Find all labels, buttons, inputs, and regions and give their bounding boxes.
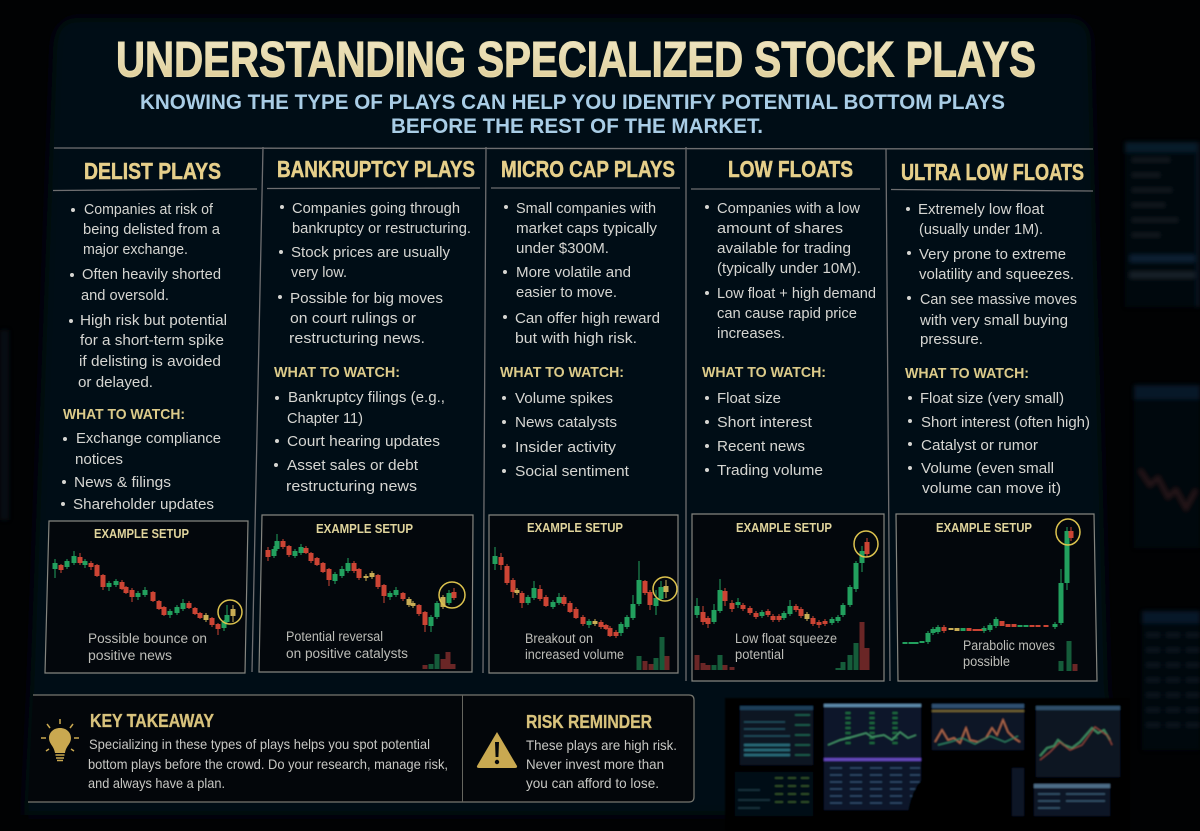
description bullets: major exchange. (83, 241, 188, 258)
example setup chart: delist: EXAMPLE SETUP (94, 527, 189, 541)
what to watch list: WHAT TO WATCH: (63, 406, 185, 423)
example setup chart: delist: Possible bounce on (88, 631, 207, 646)
callout: key takeaway: and always have a plan. (88, 775, 225, 791)
what to watch list (61, 406, 221, 513)
description bullets: and oversold. (81, 287, 169, 304)
example setup chart: micro cap: increased volume (525, 647, 624, 662)
description bullets: More volatile and (516, 264, 631, 281)
example setup chart: delist: positive news (88, 648, 172, 663)
description bullets (69, 201, 227, 391)
description bullets: being delisted from a (83, 221, 221, 238)
description bullets: for a short-term spike (80, 332, 224, 349)
example setup chart: ultra low floats: possible (963, 654, 1010, 669)
description bullets: market caps typically (516, 220, 657, 237)
what to watch list: Volume (even small (921, 460, 1054, 477)
what to watch list (905, 365, 1090, 497)
what to watch list: Asset sales or debt (287, 457, 419, 474)
monitor: lower right (1012, 768, 1110, 816)
what to watch list: Float size (717, 390, 781, 407)
trading desk monitors (725, 698, 1130, 831)
description bullets: Companies at risk of (84, 201, 214, 218)
description bullets: with very small buying (919, 312, 1068, 329)
what to watch list: Float size (very small) (920, 390, 1064, 407)
what to watch list: Short interest (often high) (921, 414, 1090, 431)
description bullets: bankruptcy or restructuring. (292, 220, 471, 237)
description bullets (705, 200, 876, 342)
description bullets: Stock prices are usually (291, 244, 450, 261)
subtitle: BEFORE THE REST OF THE MARKET. (391, 115, 763, 138)
callout: risk reminder: you can afford to lose. (526, 775, 659, 791)
callout: key takeaway (41, 711, 448, 791)
background screens: blurred monitors behind the board (0, 142, 1200, 750)
heading: low floats: LOW FLOATS (728, 156, 853, 182)
callout: risk reminder: Never invest more than (526, 756, 664, 772)
example setup chart: micro cap: EXAMPLE SETUP (527, 521, 623, 535)
description bullets: amount of shares (717, 220, 843, 237)
description bullets: (usually under 1M). (919, 221, 1043, 238)
column: ultra low floats (891, 159, 1097, 681)
what to watch list: Social sentiment (515, 463, 630, 480)
example setup chart: bankruptcy (259, 515, 473, 672)
what to watch list: Insider activity (515, 439, 617, 456)
description bullets: increases. (717, 325, 785, 342)
subtitle: KNOWING THE TYPE OF PLAYS CAN HELP YOU IDENTIFY POTENTIAL BOTTOM PLAYS (140, 91, 1005, 114)
description bullets: but with high risk. (515, 330, 637, 347)
monitor: line chart (1036, 706, 1120, 777)
description bullets: Very prone to extreme (919, 246, 1066, 263)
description bullets: under $300M. (516, 240, 609, 257)
what to watch list: Trading volume (717, 462, 823, 479)
description bullets: available for trading (717, 240, 851, 257)
what to watch list: restructuring news (286, 478, 417, 495)
what to watch list: Volume spikes (515, 390, 613, 407)
column: low floats (691, 156, 884, 681)
description bullets: Companies going through (292, 200, 460, 217)
example setup chart: bankruptcy: on positive catalysts (286, 646, 408, 661)
what to watch list: Catalyst or rumor (921, 437, 1038, 454)
callout: key takeaway: KEY TAKEAWAY (90, 711, 214, 731)
callout: key takeaway: bottom plays before the crowd. Do your research, manage risk, (88, 756, 448, 772)
what to watch list: Court hearing updates (287, 433, 440, 450)
column: delist plays (45, 158, 257, 673)
icon: light bulb (41, 719, 79, 760)
description bullets: Possible for big moves (290, 290, 443, 307)
what to watch list (274, 364, 445, 495)
monitor: price table and chart (824, 704, 921, 810)
example setup chart: micro cap (489, 515, 678, 673)
example setup chart: ultra low floats (896, 514, 1097, 681)
description bullets: can cause rapid price (717, 305, 857, 322)
description bullets: Companies with a low (717, 200, 860, 217)
what to watch list: WHAT TO WATCH: (274, 364, 400, 381)
description bullets: volatility and squeezes. (919, 266, 1074, 283)
what to watch list: News & filings (74, 474, 171, 491)
bottom callout bar (28, 695, 694, 802)
callout: risk reminder: RISK REMINDER (526, 712, 652, 732)
callout: risk reminder (477, 712, 677, 791)
what to watch list (500, 364, 630, 480)
example setup chart: low floats (692, 514, 884, 681)
example setup chart: bankruptcy: Potential reversal (286, 629, 383, 644)
description bullets: Can see massive moves (920, 291, 1077, 308)
callout: risk reminder: These plays are high risk. (526, 737, 677, 753)
what to watch list: Shareholder updates (73, 496, 214, 513)
heading: bankruptcy plays: BANKRUPTCY PLAYS (277, 156, 475, 182)
monitor: lower left (735, 772, 813, 816)
description bullets: restructuring news. (289, 330, 425, 347)
description bullets: very low. (291, 264, 347, 281)
example setup chart: low floats: Low float squeeze (735, 631, 837, 646)
what to watch list: WHAT TO WATCH: (500, 364, 624, 381)
example setup chart: ultra low floats: EXAMPLE SETUP (936, 521, 1032, 535)
what to watch list: Recent news (717, 438, 805, 455)
description bullets (278, 200, 471, 347)
what to watch list: Bankruptcy filings (e.g., (288, 389, 445, 406)
heading: ultra low floats: ULTRA LOW FLOATS (901, 159, 1084, 185)
description bullets: High risk but potential (80, 312, 227, 329)
description bullets: easier to move. (516, 284, 617, 301)
description bullets: Often heavily shorted (82, 266, 221, 283)
silhouette: trader chair (906, 765, 1010, 831)
description bullets: (typically under 10M). (717, 260, 861, 277)
what to watch list: WHAT TO WATCH: (702, 364, 826, 381)
description bullets: pressure. (920, 331, 983, 348)
description bullets: Small companies with (516, 200, 656, 217)
description bullets: Can offer high reward (515, 310, 660, 327)
description bullets: or delayed. (78, 374, 153, 391)
what to watch list: notices (75, 451, 123, 468)
description bullets: on court rulings or (290, 310, 416, 327)
example setup chart: ultra low floats: Parabolic moves (963, 638, 1055, 653)
heading: delist plays: DELIST PLAYS (84, 158, 221, 184)
what to watch list (702, 364, 826, 479)
what to watch list: News catalysts (515, 414, 617, 431)
what to watch list: Chapter 11) (287, 410, 363, 427)
column: bankruptcy plays (259, 156, 480, 672)
heading: micro cap plays: MICRO CAP PLAYS (501, 156, 675, 182)
what to watch list: WHAT TO WATCH: (905, 365, 1029, 382)
description bullets: if delisting is avoided (79, 353, 221, 370)
example setup chart: micro cap: Breakout on (525, 631, 593, 646)
description bullets (906, 201, 1077, 348)
example setup chart: delist (45, 521, 248, 673)
column: micro cap plays (489, 156, 680, 673)
subtitle (140, 91, 1005, 138)
monitor: watchlist (740, 706, 813, 765)
callout: key takeaway: Specializing in these types of plays helps you spot potential (89, 736, 430, 752)
description bullets: Low float + high demand (717, 285, 876, 302)
example setup chart: low floats: EXAMPLE SETUP (736, 521, 832, 535)
what to watch list: Exchange compliance (76, 430, 221, 447)
description bullets: Extremely low float (918, 201, 1045, 218)
icon: warning triangle (477, 732, 517, 768)
description bullets (503, 200, 660, 347)
example setup chart: bankruptcy: EXAMPLE SETUP (316, 522, 413, 536)
what to watch list: Short interest (717, 414, 813, 431)
example setup chart: low floats: potential (735, 647, 784, 662)
monitor: candlestick chart (932, 704, 1024, 750)
what to watch list: volume can move it) (922, 480, 1061, 497)
